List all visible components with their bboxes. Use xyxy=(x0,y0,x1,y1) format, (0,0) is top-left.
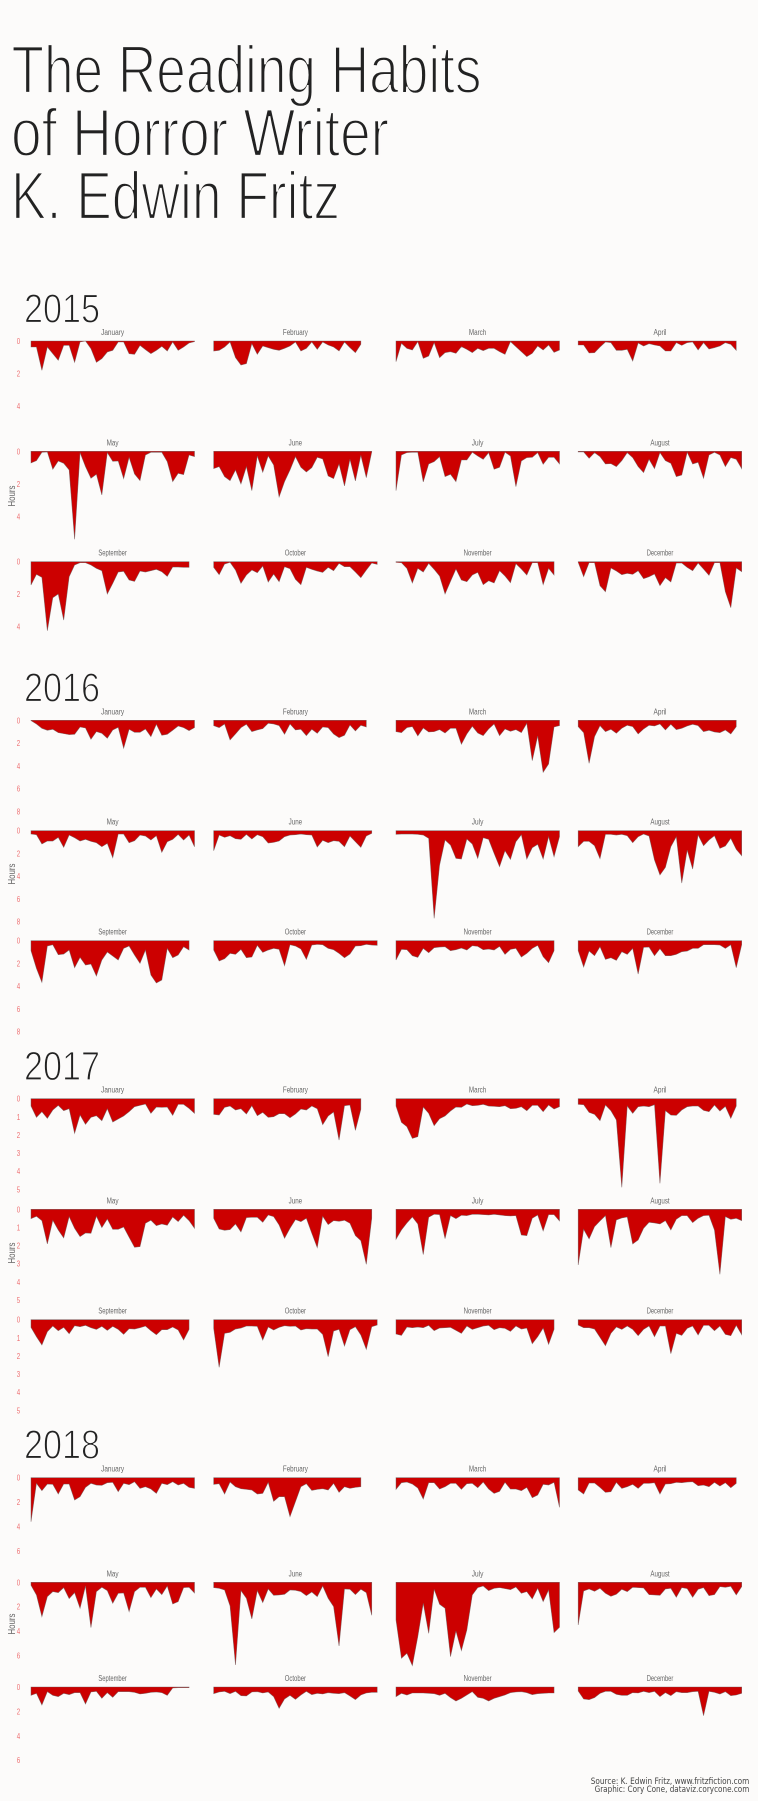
chart: December 2017: December xyxy=(647,1307,674,1316)
y axis ticks 2017: 2 xyxy=(17,1242,21,1251)
y axis ticks 2018: 6 xyxy=(17,1652,21,1660)
y axis ticks 2015: 2 xyxy=(17,590,21,599)
y axis ticks 2017: 5 xyxy=(17,1296,21,1305)
chart: February 2018 xyxy=(214,1465,361,1517)
chart: October 2018 xyxy=(214,1674,377,1708)
chart: March 2015 xyxy=(396,328,560,362)
chart: October 2016 xyxy=(214,928,377,966)
y axis ticks 2017: 0 xyxy=(17,1095,21,1104)
chart: November 2015: November xyxy=(464,549,492,558)
chart: November 2018: November xyxy=(464,1674,492,1683)
y axis ticks 2016: 6 xyxy=(17,784,21,794)
chart: October 2018: October xyxy=(285,1674,306,1683)
chart: March 2015: March xyxy=(469,328,486,337)
panel: 2015 xyxy=(7,285,742,632)
chart: June 2015: June xyxy=(289,438,303,447)
chart: June 2016 xyxy=(214,818,372,851)
y axis ticks 2016: 2 xyxy=(17,849,21,858)
chart: October 2015 xyxy=(214,549,377,585)
chart: August 2018 xyxy=(578,1569,742,1625)
y axis ticks 2017: 2 xyxy=(17,1352,21,1361)
y axis ticks 2016: 6 xyxy=(17,895,21,904)
chart: November 2015 xyxy=(396,549,554,594)
chart: May 2015: May xyxy=(107,438,119,447)
y axis ticks 2018: 2 xyxy=(17,1707,21,1716)
chart: January 2018 xyxy=(31,1465,194,1522)
y axis ticks 2016: 4 xyxy=(17,872,21,881)
source credit xyxy=(591,1777,749,1795)
y axis ticks 2017: 1 xyxy=(17,1334,21,1343)
chart: October 2017 xyxy=(214,1307,377,1367)
title xyxy=(11,32,482,234)
y axis ticks 2017: 2 xyxy=(17,1131,21,1140)
chart: April 2017 xyxy=(578,1086,736,1187)
chart: March 2017: March xyxy=(469,1086,486,1095)
y axis ticks 2015: 2 xyxy=(17,480,21,489)
chart: December 2015 xyxy=(578,549,742,608)
y axis ticks 2015: 0 xyxy=(17,447,21,456)
y axis ticks 2015 xyxy=(17,337,21,632)
chart: April 2018 xyxy=(578,1465,736,1494)
chart: January 2017: January xyxy=(101,1086,124,1095)
chart: September 2018 xyxy=(31,1674,189,1705)
chart: May 2018: May xyxy=(107,1569,119,1578)
y axis ticks 2016: 8 xyxy=(17,807,21,816)
chart: October 2016: October xyxy=(285,928,306,937)
chart: July 2016 xyxy=(396,818,560,918)
chart: March 2018: March xyxy=(469,1465,486,1474)
y axis ticks 2016: 4 xyxy=(17,982,21,991)
y axis ticks 2015: 4 xyxy=(17,623,21,632)
chart: August 2017: August xyxy=(650,1196,670,1205)
y axis ticks 2016: 8 xyxy=(17,1028,21,1037)
chart: November 2016: November xyxy=(464,928,492,937)
chart: December 2016 xyxy=(578,928,742,974)
chart: November 2017: November xyxy=(464,1307,492,1316)
chart: January 2015: January xyxy=(101,328,124,337)
chart: February 2016 xyxy=(214,707,366,740)
chart: June 2017 xyxy=(214,1196,372,1264)
chart: June 2015 xyxy=(214,438,372,497)
chart: July 2017 xyxy=(396,1196,560,1255)
y axis title 2018: Hours xyxy=(7,1614,18,1634)
y axis ticks 2017: 4 xyxy=(17,1388,21,1397)
chart: March 2016 xyxy=(396,707,560,772)
chart: July 2018 xyxy=(396,1569,560,1666)
y axis ticks 2018: 0 xyxy=(17,1683,21,1692)
chart: September 2015 xyxy=(31,549,189,631)
y axis ticks 2016: 4 xyxy=(17,762,21,771)
y axis ticks 2017 xyxy=(17,1095,21,1415)
chart: October 2015: October xyxy=(285,549,306,558)
chart: July 2017: July xyxy=(472,1196,483,1205)
year heading 2016: 2016 xyxy=(24,664,100,710)
chart: May 2017 xyxy=(31,1196,194,1247)
chart: September 2017: September xyxy=(98,1307,127,1316)
chart: September 2016 xyxy=(31,928,189,983)
chart: February 2018: February xyxy=(283,1465,308,1474)
chart: March 2017 xyxy=(396,1086,560,1138)
chart: May 2016 xyxy=(31,818,194,858)
chart: February 2017: February xyxy=(283,1086,308,1095)
y axis ticks 2016: 2 xyxy=(17,959,21,968)
y axis ticks 2015: 2 xyxy=(17,370,21,378)
chart: February 2016: February xyxy=(283,707,308,716)
y axis ticks 2017: 4 xyxy=(17,1167,21,1176)
y axis ticks 2017: 3 xyxy=(17,1149,21,1158)
y axis ticks 2018: 0 xyxy=(17,1578,21,1587)
chart: May 2017: May xyxy=(107,1196,119,1205)
chart: July 2015 xyxy=(396,438,560,491)
chart: April 2017: April xyxy=(654,1086,667,1095)
chart: January 2016 xyxy=(31,707,194,748)
y axis title 2015: Hours xyxy=(7,486,18,506)
chart: September 2015: September xyxy=(98,549,127,558)
y axis ticks 2017: 3 xyxy=(17,1260,21,1269)
title: The Reading Habits xyxy=(12,32,482,108)
chart: April 2018: April xyxy=(654,1465,667,1474)
y axis ticks 2015: 4 xyxy=(17,512,21,521)
y axis ticks 2018: 4 xyxy=(17,1627,21,1636)
chart: April 2015 xyxy=(578,328,736,361)
chart: July 2016: July xyxy=(472,818,483,827)
y axis ticks 2017: 3 xyxy=(17,1370,21,1379)
year heading 2015: 2015 xyxy=(24,285,100,331)
chart: June 2017: June xyxy=(289,1196,303,1205)
y axis title 2016: Hours xyxy=(7,864,18,884)
chart: April 2015: April xyxy=(654,328,667,337)
y axis title 2017: Hours xyxy=(7,1242,18,1264)
chart: June 2016: June xyxy=(289,818,303,827)
chart: August 2016: August xyxy=(650,818,670,827)
chart: December 2016: December xyxy=(647,928,674,937)
chart: February 2015: February xyxy=(283,328,308,337)
chart: January 2018: January xyxy=(101,1465,124,1474)
y axis ticks 2017: 1 xyxy=(17,1223,21,1232)
y axis ticks 2017: 4 xyxy=(17,1278,21,1287)
y axis ticks 2018: 4 xyxy=(17,1522,21,1532)
y axis ticks 2016: 0 xyxy=(17,716,21,725)
y axis ticks 2017: 5 xyxy=(17,1406,21,1415)
y axis ticks 2015: 0 xyxy=(17,558,21,567)
chart: July 2018: July xyxy=(472,1569,483,1578)
year heading 2018: 2018 xyxy=(24,1422,100,1468)
panel: 2016 xyxy=(7,664,742,1037)
panel: 2017 xyxy=(7,1043,742,1415)
chart: April 2016 xyxy=(578,707,736,763)
y axis ticks 2016: 2 xyxy=(17,739,21,748)
y axis ticks 2018: 2 xyxy=(17,1603,21,1612)
y axis ticks 2017: 0 xyxy=(17,1205,21,1214)
chart: June 2018 xyxy=(214,1569,372,1665)
chart: March 2016: March xyxy=(469,707,486,716)
title: K. Edwin Fritz xyxy=(11,158,340,234)
chart: August 2017 xyxy=(578,1196,742,1274)
chart: May 2018 xyxy=(31,1569,194,1628)
chart: October 2017: October xyxy=(285,1307,306,1316)
y axis ticks 2016: 0 xyxy=(17,827,21,836)
y axis ticks 2018: 2 xyxy=(17,1498,21,1507)
chart: May 2016: May xyxy=(107,818,119,827)
year heading 2017: 2017 xyxy=(24,1043,100,1089)
y axis ticks 2015: 0 xyxy=(17,337,21,346)
chart: August 2018: August xyxy=(650,1569,670,1578)
chart: December 2018: December xyxy=(647,1674,674,1683)
chart: February 2015 xyxy=(214,328,361,365)
title: of Horror Writer xyxy=(11,95,389,171)
y axis ticks 2016: 6 xyxy=(17,1005,21,1014)
chart: January 2015 xyxy=(31,328,194,370)
y axis ticks 2018: 4 xyxy=(17,1732,21,1741)
chart: November 2017 xyxy=(396,1307,554,1344)
chart: November 2018 xyxy=(396,1674,554,1701)
chart: August 2015: August xyxy=(650,438,670,447)
y axis ticks 2017: 0 xyxy=(17,1316,21,1325)
chart: December 2018 xyxy=(578,1674,742,1716)
chart: March 2018 xyxy=(396,1465,560,1507)
chart: July 2015: July xyxy=(472,438,483,447)
y axis ticks 2018: 6 xyxy=(17,1547,21,1556)
chart: December 2015: December xyxy=(647,549,674,558)
y axis ticks 2018: 6 xyxy=(17,1756,21,1765)
chart: September 2018: September xyxy=(98,1674,127,1683)
chart: December 2017 xyxy=(578,1307,742,1354)
chart: January 2017 xyxy=(31,1086,194,1133)
chart: April 2016: April xyxy=(654,707,667,716)
panel: 2018 xyxy=(7,1422,742,1765)
chart: February 2017 xyxy=(214,1086,361,1140)
y axis ticks 2018 xyxy=(17,1474,21,1765)
y axis ticks 2016: 8 xyxy=(17,918,21,927)
chart: November 2016 xyxy=(396,928,554,963)
chart: June 2018: June xyxy=(289,1569,303,1578)
y axis ticks 2016 xyxy=(17,716,21,1037)
chart: September 2017 xyxy=(31,1307,189,1345)
y axis ticks 2017: 1 xyxy=(17,1113,21,1122)
chart: August 2015 xyxy=(578,438,742,478)
y axis ticks 2017: 5 xyxy=(17,1185,21,1194)
chart: May 2015 xyxy=(31,438,194,539)
chart: August 2016 xyxy=(578,818,742,883)
y axis ticks 2018: 0 xyxy=(17,1474,21,1483)
chart: September 2016: September xyxy=(98,928,127,937)
y axis ticks 2015: 4 xyxy=(17,402,21,411)
chart: January 2016: January xyxy=(101,707,124,716)
y axis ticks 2016: 0 xyxy=(17,937,21,946)
